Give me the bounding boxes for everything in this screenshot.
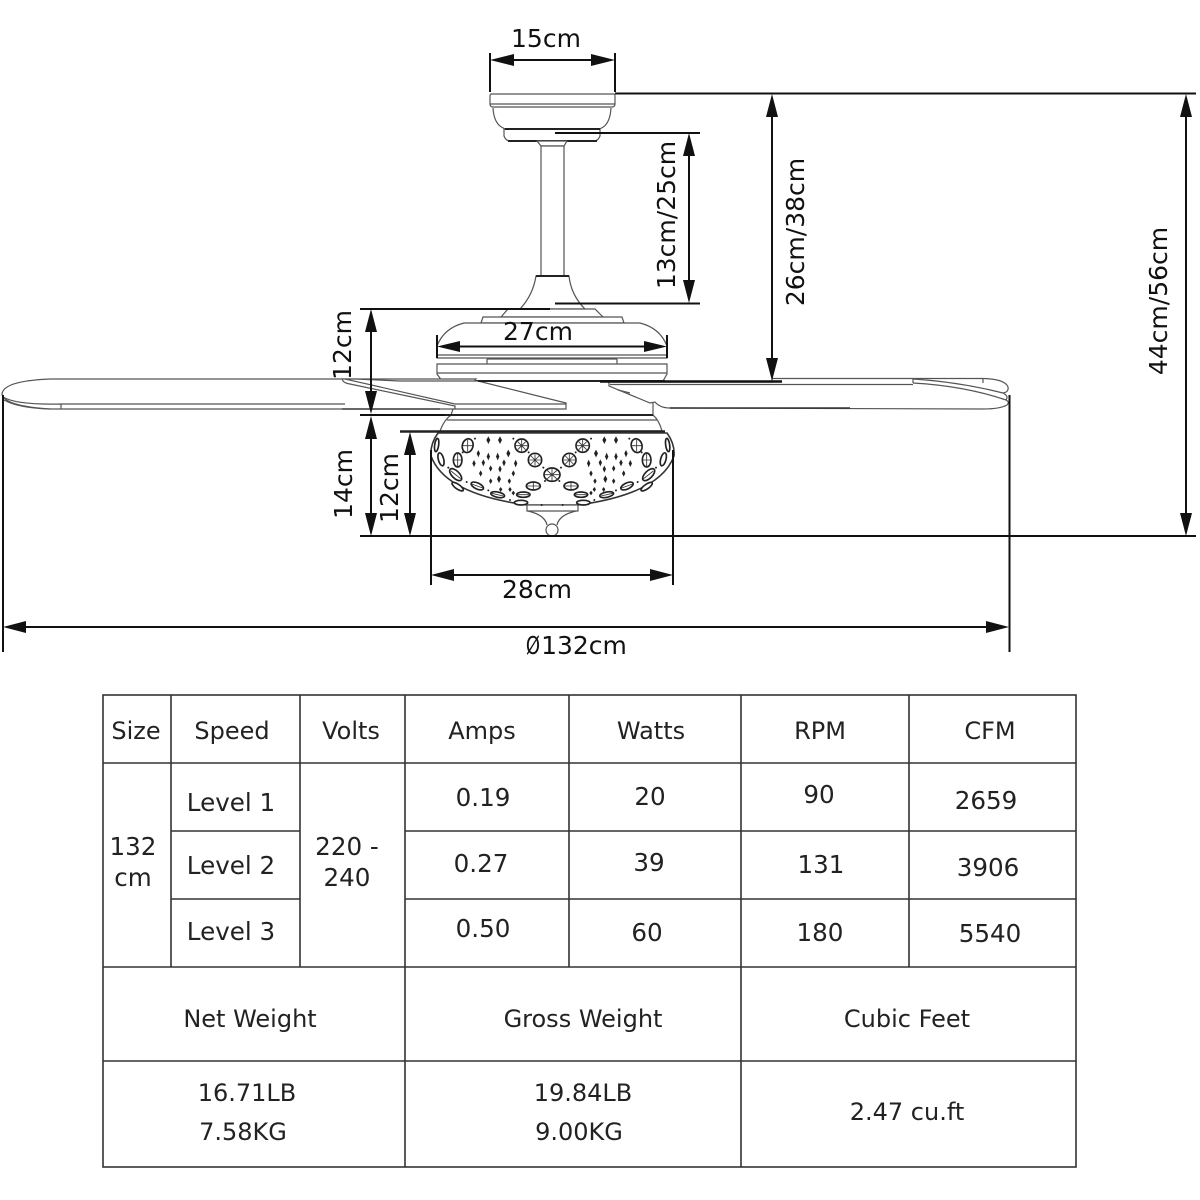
dimension: blade span 132cm: Ø	[526, 632, 540, 661]
dimension: blade span 132cm	[3, 395, 1010, 661]
fan technical drawing	[2, 94, 1008, 536]
weight and volume values: 19.84LB	[534, 1079, 632, 1107]
dimension: motor width 27cm	[437, 317, 667, 358]
speed levels	[187, 788, 275, 946]
rpm values: 180	[797, 918, 843, 947]
dimension: drop 13cm/25cm	[555, 133, 700, 304]
dimension: light height 14cm: 14cm	[329, 449, 358, 519]
right half of pattern	[558, 436, 671, 506]
specification table	[103, 695, 1076, 1167]
dimension: blade span 132cm: 132cm	[541, 631, 627, 660]
table header row: CFM	[964, 717, 1016, 745]
rpm values: 90	[803, 780, 835, 809]
table header row: Watts	[617, 717, 685, 745]
watts values: 39	[633, 848, 665, 877]
size and volts cells: 240	[324, 863, 370, 892]
dimension: 26cm/38cm: 26cm/38cm	[781, 158, 810, 306]
dimension: bowl width 28cm	[431, 450, 673, 604]
table grid	[103, 695, 1076, 1167]
bowl rosettes and leaf marks	[434, 436, 671, 506]
lower housing	[400, 409, 665, 432]
rpm values: 131	[798, 850, 844, 879]
weight and volume headings: Net Weight	[183, 1005, 317, 1033]
weight and volume values	[198, 1079, 964, 1146]
weight and volume headings	[183, 1005, 970, 1033]
speed levels: Level 1	[187, 788, 275, 817]
motor housing	[437, 309, 667, 381]
watts values: 60	[631, 918, 663, 947]
size and volts cells: cm	[114, 863, 152, 892]
table header row: Speed	[194, 717, 270, 745]
amps values: 0.27	[454, 849, 508, 878]
left half of pattern	[434, 436, 546, 506]
canopy and downrod	[490, 94, 615, 309]
light bowl with pattern	[431, 433, 674, 536]
table header row: Size	[111, 717, 161, 745]
speed levels: Level 2	[187, 851, 275, 880]
cfm values: 2659	[955, 786, 1017, 815]
dimension: drop 13cm/25cm: 13cm/25cm	[652, 141, 681, 289]
watts values	[631, 782, 666, 947]
centre rosette	[544, 468, 560, 481]
dimension: light height 14cm	[329, 415, 445, 536]
size and volts cells: 220 -	[315, 832, 379, 861]
dimension: 26cm/38cm	[615, 94, 1196, 381]
dimension: bowl height 12cm: 12cm	[375, 453, 404, 523]
weight and volume values: 9.00KG	[535, 1118, 623, 1146]
amps values: 0.50	[456, 914, 510, 943]
table header row: Amps	[448, 717, 516, 745]
dimension: overall height 44cm/56cm: 44cm/56cm	[1144, 227, 1173, 375]
size and volts cells	[110, 832, 379, 892]
dimension: bowl width 28cm: 28cm	[502, 575, 572, 604]
amps values	[454, 783, 510, 943]
weight and volume values: 7.58KG	[199, 1118, 287, 1146]
cfm values: 3906	[957, 853, 1019, 882]
dimension: canopy width 15cm: 15cm	[511, 24, 581, 53]
dimension: motor height 12cm: 12cm	[328, 310, 357, 380]
weight and volume values: 2.47 cu.ft	[850, 1098, 964, 1126]
amps values: 0.19	[456, 783, 510, 812]
left fan blade	[2, 379, 566, 409]
weight and volume values: 16.71LB	[198, 1079, 296, 1107]
watts values: 20	[634, 782, 666, 811]
table header row: RPM	[794, 717, 846, 745]
dimension: motor height 12cm	[328, 309, 550, 414]
dimension: bowl height 12cm	[375, 432, 416, 536]
weight and volume headings: Cubic Feet	[844, 1005, 970, 1033]
table header row	[111, 717, 1016, 745]
dimension: overall height 44cm/56cm	[360, 94, 1196, 536]
dimension: motor width 27cm: 27cm	[503, 317, 573, 346]
dimension: canopy width 15cm	[490, 24, 615, 92]
size and volts cells: 132	[110, 832, 156, 861]
cfm values	[955, 786, 1021, 948]
speed levels: Level 3	[187, 917, 275, 946]
rpm values	[797, 780, 844, 947]
table header row: Volts	[322, 717, 380, 745]
cfm values: 5540	[959, 919, 1021, 948]
right fan blade	[600, 378, 1008, 415]
weight and volume headings: Gross Weight	[504, 1005, 662, 1033]
